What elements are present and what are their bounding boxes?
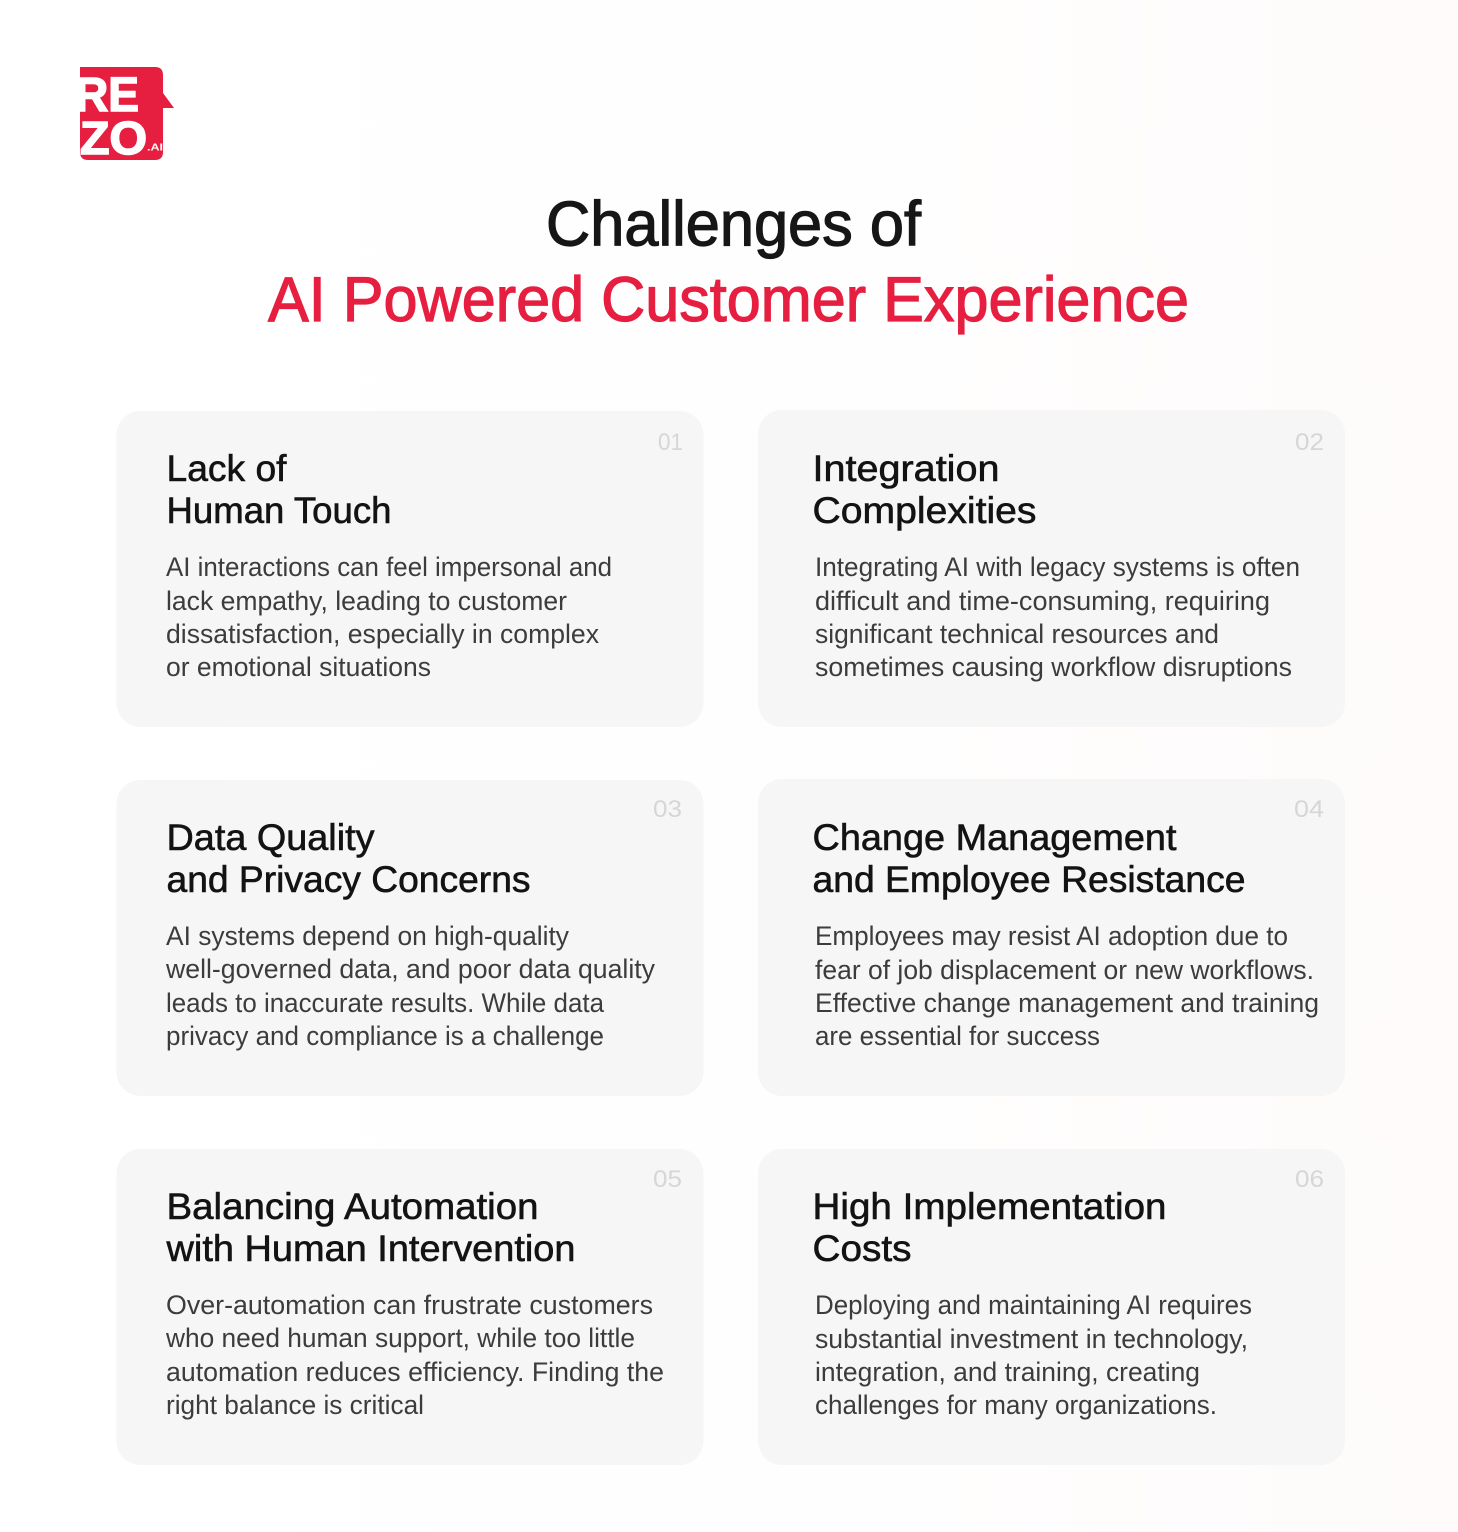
panel: 05 balancing automation: right balance is critical <box>166 1390 424 1420</box>
panel: 03 data quality and privacy: AI systems depend on high-quality <box>166 921 569 951</box>
panel: 06 high implementation costs: integration, and training, creating <box>815 1357 1200 1387</box>
panel: 06 high implementation costs: substantial investment in technology, <box>815 1324 1248 1354</box>
panel: 03 data quality and privacy: privacy and compliance is a challenge <box>166 1021 604 1051</box>
panel: 04 change management: are essential for success <box>815 1021 1100 1051</box>
title: AI Powered Customer Experience <box>268 265 1189 335</box>
panel: 03 data quality and privacy: 03 <box>653 796 682 823</box>
panel: 05 balancing automation: Over-automation can frustrate customers <box>166 1290 653 1320</box>
panel: 01 lack of human touch: Human Touch <box>166 490 392 531</box>
panel: 01 lack of human touch: Lack of <box>166 448 287 489</box>
panel: 04 change management: Employees may resist AI adoption due to <box>815 921 1288 951</box>
panel: 03 data quality and privacy: Data Quality <box>166 817 375 858</box>
panel: 03 data quality and privacy: leads to inaccurate results. While data <box>166 988 605 1018</box>
panel: 06 high implementation costs <box>758 1149 1345 1465</box>
panel: 02 integration complexities: sometimes causing workflow disruptions <box>815 652 1292 682</box>
panel: 02 integration complexities: difficult and time-consuming, requiring <box>815 586 1270 616</box>
panel: 01 lack of human touch: AI interactions can feel impersonal and <box>166 552 612 582</box>
panel: 02 integration complexities <box>758 410 1345 727</box>
panel: 01 lack of human touch <box>116 411 704 727</box>
panel: 02 integration complexities: significant technical resources and <box>815 619 1219 649</box>
panel: 04 change management: and Employee Resistance <box>812 859 1246 900</box>
panel: 04 change management: fear of job displacement or new workflows. <box>815 955 1314 985</box>
panel: 05 balancing automation: who need human support, while too little <box>165 1323 635 1353</box>
panel: 06 high implementation costs: Costs <box>812 1228 912 1269</box>
panel: 06 high implementation costs: 06 <box>1295 1166 1324 1193</box>
logo: ZO <box>80 112 147 164</box>
logo: RE <box>75 69 139 122</box>
panel: 01 lack of human touch: or emotional situations <box>166 652 431 682</box>
panel: 06 high implementation costs: High Implementation <box>812 1186 1166 1227</box>
panel: 03 data quality and privacy <box>116 780 704 1096</box>
panel: 02 integration complexities: 02 <box>1295 429 1324 456</box>
panel: 06 high implementation costs: Deploying and maintaining AI requires <box>815 1290 1252 1320</box>
panel: 06 high implementation costs: challenges for many organizations. <box>815 1390 1217 1420</box>
panel: 01 lack of human touch: dissatisfaction, especially in complex <box>166 619 599 649</box>
logo: .AI <box>147 142 163 154</box>
panel: 04 change management: 04 <box>1294 796 1324 823</box>
panel: 04 change management: Change Management <box>812 817 1177 858</box>
panel: 04 change management <box>758 779 1345 1096</box>
panel: 03 data quality and privacy: and Privacy Concerns <box>166 859 530 900</box>
panel: 05 balancing automation: with Human Intervention <box>165 1228 575 1269</box>
logo <box>75 67 174 164</box>
panel: 01 lack of human touch: 01 <box>658 429 683 456</box>
panel: 02 integration complexities: Integration <box>812 448 1000 489</box>
panel: 02 integration complexities: Complexities <box>812 490 1036 531</box>
panel: 05 balancing automation: 05 <box>653 1166 682 1193</box>
panel: 02 integration complexities: Integrating AI with legacy systems is often <box>815 552 1300 582</box>
title <box>268 190 1189 335</box>
title: Challenges of <box>546 190 921 260</box>
panel: 05 balancing automation: automation reduces efficiency. Finding the <box>166 1357 664 1387</box>
panel: 05 balancing automation: Balancing Automation <box>166 1186 538 1227</box>
panel: 05 balancing automation <box>116 1149 704 1465</box>
panel: 01 lack of human touch: lack empathy, leading to customer <box>166 586 567 616</box>
panel: 04 change management: Effective change management and training <box>815 988 1319 1018</box>
panel: 03 data quality and privacy: well-governed data, and poor data quality <box>165 954 655 984</box>
